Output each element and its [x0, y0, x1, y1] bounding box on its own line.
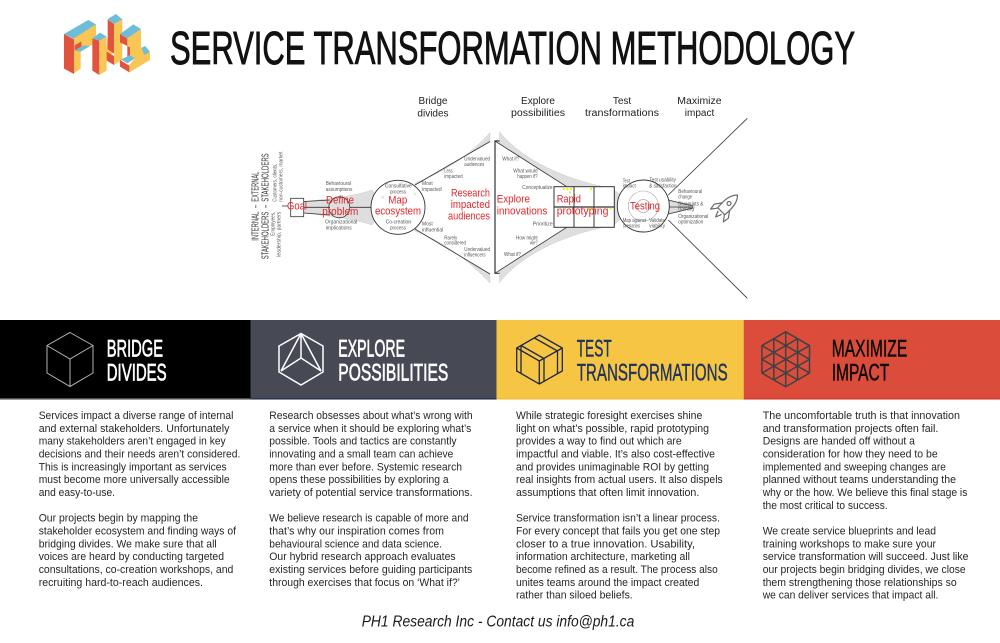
- icon: rocket: [709, 188, 745, 224]
- small funnel labels: Rarely: [444, 235, 457, 241]
- stakeholder labels: INTERNAL: [250, 212, 262, 241]
- red stage labels: [287, 187, 660, 222]
- text block: test transformations: rather than siloed beliefs.: [516, 590, 633, 602]
- text block: maximize impact: [762, 410, 968, 602]
- small funnel labels: Undervalued: [464, 156, 490, 162]
- text block: maximize impact: implemented and sweeping changes are: [763, 461, 946, 473]
- text block: explore possibilities: Research obsesses about what’s wrong with: [269, 410, 473, 422]
- small funnel labels: change: [678, 195, 692, 201]
- stage headings above diagram: possibilities: [511, 108, 565, 119]
- icon: faceted hexagon: [279, 334, 323, 385]
- small funnel labels: Test usability: [649, 178, 676, 184]
- text block: bridge divides: recruiting hard-to-reach audiences.: [39, 577, 203, 589]
- panel: explore possibilities header: EXPLORE: [338, 336, 405, 363]
- stage headings above diagram: impact: [685, 108, 714, 119]
- small funnel labels: assumptions: [326, 187, 353, 193]
- small funnel labels: Conceptualize: [522, 185, 553, 191]
- stage headings above diagram: Test: [613, 96, 631, 107]
- red stage labels: innovations: [497, 205, 547, 217]
- text block: bridge divides: stakeholder ecosystem and finding ways of: [39, 526, 237, 538]
- text block: test transformations: become refined as a result. The process also: [516, 564, 718, 576]
- text block: explore possibilities: innovating and a small team can achieve: [269, 448, 453, 460]
- panel: test transformations header: TEST: [577, 336, 612, 363]
- icon: triangulated hexagon: [756, 332, 815, 387]
- stakeholder labels: non-customers, market: [278, 151, 284, 202]
- stage headings above diagram: Explore: [521, 96, 555, 107]
- panel: bridge divides header: [0, 320, 250, 400]
- footer: contact line: PH1 Research Inc - Contact us info@ph1.ca: [362, 614, 635, 631]
- small funnel labels: impacted: [422, 187, 442, 193]
- text block: maximize impact: and transformation projects often fail.: [763, 423, 938, 435]
- text block: maximize impact: We create service blueprints and lead: [763, 526, 936, 538]
- small funnel labels: Validate: [649, 218, 665, 224]
- red stage labels: prototyping: [557, 205, 609, 217]
- text block: test transformations: Service transformation isn’t a linear process.: [516, 513, 720, 525]
- small funnel labels: process: [390, 189, 406, 195]
- text block: explore possibilities: existing services before guiding participants: [269, 564, 473, 576]
- small funnel labels: Behavioural: [678, 189, 702, 195]
- small funnel labels: Prioritize: [533, 221, 553, 227]
- small funnel labels: impacted: [444, 174, 463, 180]
- text block: maximize impact: training workshops to make sure your: [763, 538, 936, 550]
- text block: maximize impact: planned without teams understanding the: [763, 474, 956, 486]
- panel: explore possibilities header: POSSIBILITIES: [338, 359, 448, 386]
- text block: test transformations: assumptions that often limit innovation.: [516, 487, 699, 499]
- small funnel labels: considered: [444, 241, 466, 247]
- small funnel labels: Test: [623, 178, 630, 184]
- text block: test transformations: real insights from actual users. It also dispels: [516, 474, 723, 486]
- small funnel labels: implications: [326, 225, 352, 231]
- small funnel labels: & satisfaction: [649, 183, 677, 189]
- panel: bridge divides header: DIVIDES: [107, 359, 167, 386]
- stakeholder labels: STAKEHOLDERS: [260, 212, 272, 259]
- small funnel labels: What if?: [504, 252, 521, 258]
- testing target circles: [617, 180, 669, 232]
- panel: test transformations header: [496, 320, 744, 400]
- stakeholder labels: [250, 151, 284, 259]
- stage headings above diagram: [417, 96, 722, 120]
- red stage labels: Testing: [630, 200, 660, 212]
- text block: bridge divides: [39, 410, 240, 589]
- text block: test transformations: [516, 410, 723, 602]
- panel: maximize impact header: IMPACT: [832, 359, 889, 386]
- red stage labels: Define: [326, 194, 354, 206]
- small funnel labels: influential: [422, 228, 443, 234]
- text block: explore possibilities: a service when it should be exploring what’s: [269, 423, 472, 435]
- small funnel labels: Co-creation: [386, 220, 411, 226]
- circle: define problem: [329, 197, 350, 218]
- text block: explore possibilities: [269, 410, 473, 589]
- stakeholder labels: Customers, clients,: [272, 163, 278, 202]
- small funnel labels: viability: [649, 223, 665, 229]
- small funnel labels: Consultative: [385, 184, 412, 190]
- small funnel labels: scenarios: [623, 223, 640, 229]
- small funnel labels: Most: [422, 222, 433, 228]
- red stage labels: problem: [322, 206, 358, 218]
- goal box: [291, 198, 304, 217]
- circle: map ecosystem: [371, 180, 425, 234]
- text block: maximize impact: our projects begin bridging divides, we close: [763, 564, 966, 576]
- red stage labels: audiences: [448, 210, 490, 222]
- red stage labels: Research: [451, 187, 490, 199]
- panel: maximize impact header: [744, 320, 1000, 400]
- stage headings above diagram: divides: [417, 108, 449, 120]
- panel: maximize impact header: MAXIMIZE: [832, 336, 907, 363]
- small funnel labels: Less: [444, 169, 453, 175]
- text block: bridge divides: and easy-to-use.: [39, 487, 115, 499]
- text block: maximize impact: Designs are handed off without a: [763, 436, 916, 448]
- text block: bridge divides: many stakeholders aren’t engaged in key: [39, 436, 226, 448]
- panel: explore possibilities header: [250, 320, 496, 400]
- panel: bridge divides header: BRIDGE: [107, 336, 163, 363]
- small funnel labels: Organizational: [678, 214, 708, 220]
- small funnel labels: audiences: [464, 162, 484, 168]
- stage headings above diagram: transformations: [585, 108, 659, 119]
- text block: maximize impact: The uncomfortable truth is that innovation: [763, 410, 960, 422]
- text block: bridge divides: This is increasingly important as services: [39, 461, 227, 473]
- prototype grid: [554, 187, 614, 227]
- icon: cube: [47, 332, 93, 386]
- text block: explore possibilities: through exercises that focus on ‘What if?’: [269, 577, 460, 589]
- text block: test transformations: While strategic foresight exercises shine: [516, 410, 702, 422]
- red stage labels: Explore: [497, 194, 530, 206]
- stakeholder labels: leadership, partners: [276, 212, 282, 257]
- text block: explore possibilities: more than ever before. Systemic research: [269, 461, 462, 473]
- funnel connector lines: [282, 118, 747, 298]
- text block: explore possibilities: opens these possibilities by exploring a: [269, 474, 449, 486]
- red stage labels: Rapid: [557, 194, 581, 206]
- small funnel labels: impact: [623, 184, 636, 190]
- text block: bridge divides: voices are heard by conducting targeted: [39, 551, 224, 563]
- text block: maximize impact: consideration for how they need to be: [763, 448, 938, 460]
- small funnel labels: optimization: [678, 220, 703, 226]
- text block: bridge divides: bridging divides. We make sure that all: [39, 538, 217, 550]
- text block: explore possibilities: variety of potential service transformations.: [269, 487, 473, 499]
- small funnel labels: process: [390, 225, 406, 231]
- text block: test transformations: light on what’s possible, rapid prototyping: [516, 423, 709, 435]
- text block: bridge divides: consultations, co-creation workshops, and: [39, 564, 233, 576]
- text block: test transformations: information architecture, marketing all: [516, 551, 690, 563]
- text block: maximize impact: why or the how. We believe this final stage is: [762, 487, 968, 499]
- stage headings above diagram: Maximize: [677, 96, 722, 107]
- stakeholder labels: EXTERNAL: [250, 172, 262, 202]
- text block: explore possibilities: behavioural science and data science.: [269, 538, 442, 550]
- diagram: service transformation funnel: [250, 96, 747, 298]
- small funnel labels: training: [678, 207, 694, 213]
- text block: maximize impact: them strengthening those relationships so: [763, 577, 957, 589]
- text block: bridge divides: Services impact a diverse range of internal: [39, 410, 233, 422]
- red stage labels: Goal: [287, 200, 307, 212]
- red stage labels: impacted: [451, 199, 490, 211]
- small funnel labels: What if?: [502, 156, 519, 162]
- text block: explore possibilities: We believe research is capable of more and: [269, 513, 469, 525]
- small funnel labels: Map against: [623, 218, 646, 224]
- icon: nested box: [517, 335, 562, 384]
- small funnel labels: What would: [513, 169, 538, 175]
- small funnel labels: happen if?: [517, 174, 538, 180]
- text block: test transformations: provides a way to find out which are: [516, 436, 682, 448]
- small funnel labels: Blueprints &: [678, 202, 704, 208]
- yellow sticky dots: [563, 188, 612, 210]
- text block: test transformations: closer to a true innovation. Usability,: [516, 538, 695, 550]
- small funnel labels: influencers: [464, 253, 486, 259]
- small funnel labels: Behavioural: [326, 181, 351, 187]
- red stage labels: ecosystem: [375, 206, 421, 218]
- text block: bridge divides: and external stakeholders. Unfortunately: [39, 423, 230, 435]
- stakeholder labels: STAKEHOLDERS: [260, 153, 272, 202]
- text block: bridge divides: must become more universally accessible: [39, 474, 230, 486]
- text block: bridge divides: decisions and their needs aren’t considered.: [39, 448, 240, 460]
- text block: test transformations: unites teams around the impact created: [516, 577, 699, 589]
- text block: maximize impact: the most critical to success.: [763, 500, 888, 512]
- text block: explore possibilities: possible. Tools and tactics are constantly: [269, 436, 457, 448]
- text block: maximize impact: we can deliver services that impact all.: [762, 590, 938, 602]
- red stage labels: Map: [388, 194, 407, 206]
- small funnel labels: we?: [529, 241, 538, 247]
- text block: explore possibilities: that’s why our inspiration comes from: [269, 526, 444, 538]
- small funnel labels: Organizational: [325, 219, 357, 225]
- stakeholder labels: Employees,: [270, 211, 276, 236]
- panel: test transformations header: TRANSFORMATIONS: [577, 359, 728, 386]
- funnel shapes: grey bands: [304, 132, 695, 283]
- text block: test transformations: For every concept that fails you get one step: [516, 526, 720, 538]
- small funnel labels: Undervalued: [464, 247, 490, 253]
- stage headings above diagram: Bridge: [419, 96, 448, 107]
- small funnel labels: Most: [422, 181, 433, 187]
- text block: explore possibilities: Our hybrid research approach evaluates: [269, 551, 456, 563]
- logo: PH1 isometric blocks: [64, 14, 150, 75]
- small funnel labels: How might: [516, 235, 538, 241]
- small funnel labels: [325, 156, 708, 259]
- text block: bridge divides: Our projects begin by mapping the: [39, 513, 198, 525]
- text block: test transformations: impactful and viable. It’s also cost-effective: [516, 448, 715, 460]
- text block: maximize impact: service transformation will succeed. Just like: [763, 551, 968, 563]
- text block: test transformations: and provides unimaginable ROI by getting: [516, 461, 709, 473]
